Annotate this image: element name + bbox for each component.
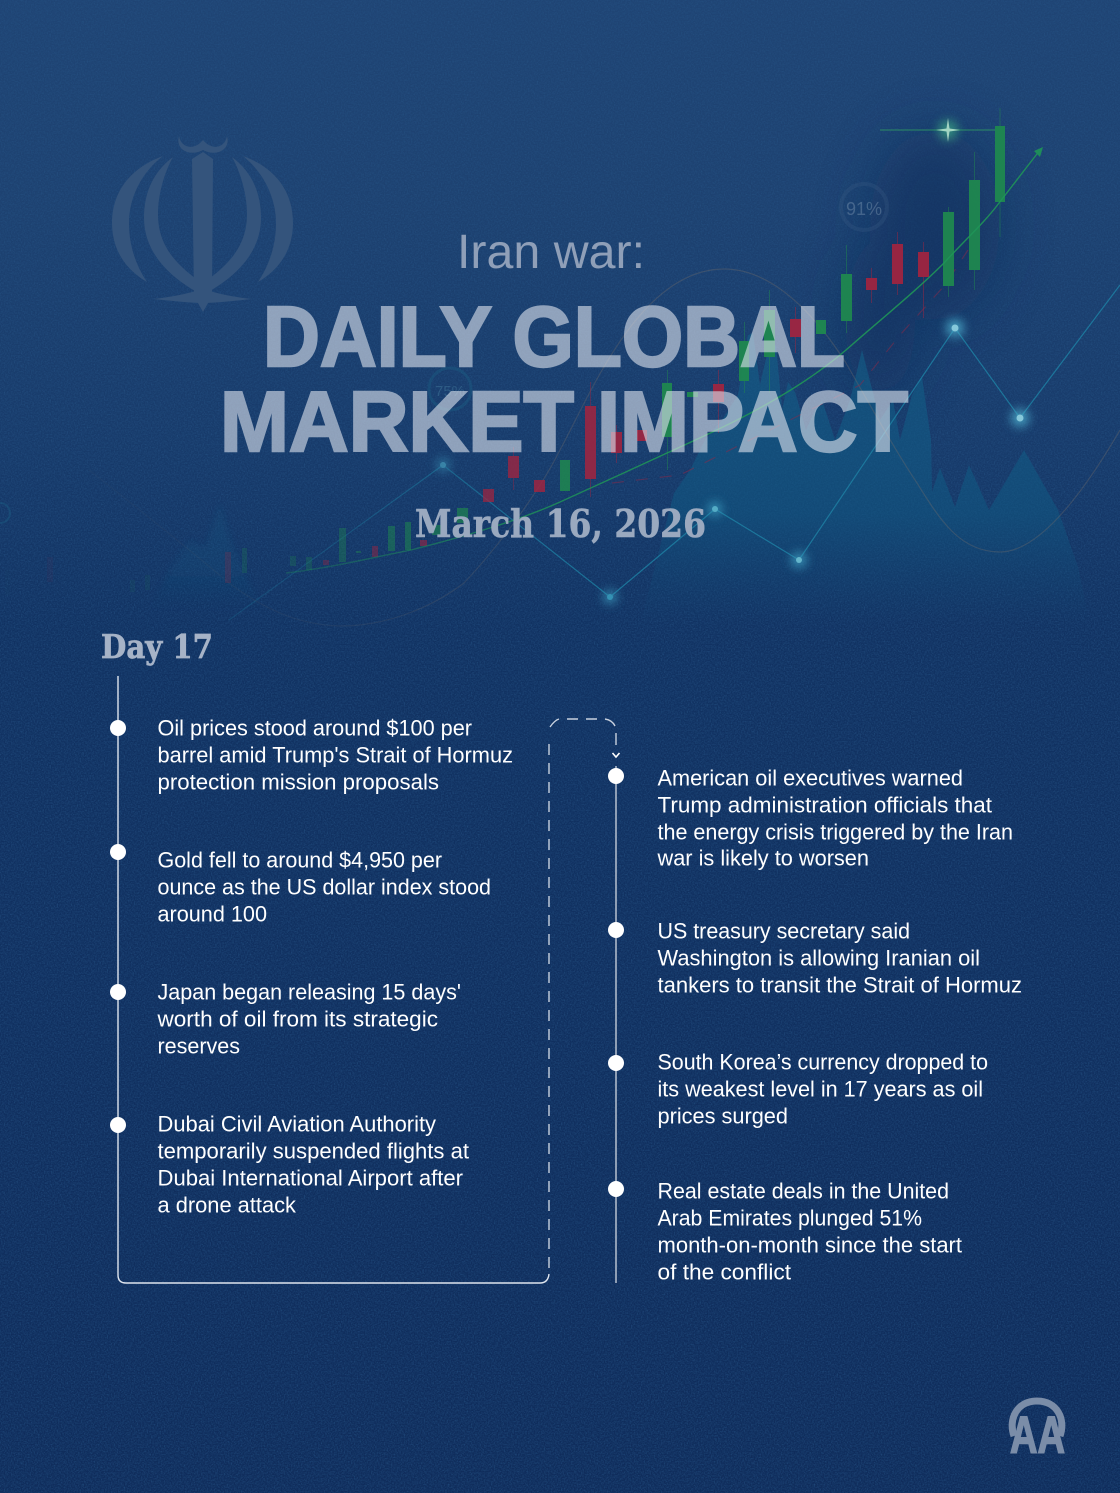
event: oil executives <box>608 766 1013 870</box>
title: date: March 16, 2026 <box>415 501 706 546</box>
title: main heading: DAILY GLOBAL <box>263 290 845 385</box>
gauge: partial ring at left edge <box>0 503 10 523</box>
chart: green rising trend arrow <box>286 147 1043 573</box>
event: US treasury <box>608 918 1022 998</box>
chart: teal area mountain <box>640 333 1090 625</box>
event: Japan reserves: worth of oil from its strategic <box>156 1006 438 1032</box>
timeline connector: dashed link to right column <box>549 719 616 1268</box>
gauge: 91% ring: 91% <box>846 199 882 219</box>
event: Dubai flights: Dubai International Airport after <box>158 1166 463 1190</box>
panel: right column events <box>608 766 1022 1284</box>
event: South Korea: prices surged <box>658 1104 788 1128</box>
icon: dark rocket silhouette behind candles <box>845 130 1000 400</box>
event: oil executives: the energy crisis triggered by the Iran <box>658 820 1013 844</box>
event: Dubai flights: temporarily suspended flights at <box>158 1138 469 1164</box>
event: Dubai flights: Dubai Civil Aviation Authority <box>158 1112 436 1136</box>
event: oil prices: Oil prices stood around $100 per <box>158 716 472 740</box>
event: oil prices <box>110 716 513 794</box>
event: UAE real estate: Arab Emirates plunged 51% <box>658 1206 922 1230</box>
timeline line: right column <box>615 766 617 1283</box>
event: Japan reserves <box>110 980 461 1058</box>
event: gold: Gold fell to around $4,950 per <box>158 848 442 872</box>
chart: red dashed trend <box>612 250 968 483</box>
event: oil prices: barrel amid Trump's Strait of Hormuz <box>158 742 513 768</box>
chart: brown sine curve <box>89 269 1120 626</box>
heading: Day 17: Day 17 <box>101 627 213 666</box>
event: UAE real estate: Real estate deals in the United <box>658 1178 949 1204</box>
event: South Korea <box>608 1050 988 1128</box>
icon: chevron arrow <box>612 753 620 757</box>
title: subtitle: Iran war: <box>457 226 645 279</box>
green candles <box>242 108 1005 573</box>
event: oil prices: protection mission proposals <box>158 770 439 794</box>
event: Dubai flights <box>110 1112 469 1218</box>
event: Dubai flights: a drone attack <box>158 1192 297 1218</box>
title block <box>220 226 908 546</box>
event: oil executives: American oil executives warned <box>658 766 963 790</box>
timeline connector: left line and bottom <box>118 676 549 1283</box>
gauge: 75% ring <box>429 368 471 410</box>
event: Japan reserves: reserves <box>158 1034 240 1058</box>
gauge: 91% ring <box>841 184 887 230</box>
event: UAE real estate: of the conflict <box>658 1260 791 1284</box>
event: gold: ounce as the US dollar index stood <box>158 874 491 900</box>
chart: faint teal peaks on the left <box>150 505 262 610</box>
red candles <box>225 232 929 583</box>
event: Japan reserves: Japan began releasing 15 days' <box>158 980 461 1004</box>
event: UAE real estate: month-on-month since the start <box>658 1232 962 1258</box>
event: gold: around 100 <box>158 902 267 926</box>
icon: Iran emblem watermark <box>112 136 293 312</box>
title: main heading: MARKET IMPACT <box>220 375 908 470</box>
logo: Anadolu Agency AA: AA <box>1010 1406 1065 1464</box>
event: South Korea: South Korea’s currency dropped to <box>658 1050 988 1074</box>
logo: Anadolu Agency AA <box>1010 1401 1065 1464</box>
event: South Korea: its weakest level in 17 years as oil <box>658 1076 983 1102</box>
event: US treasury: US treasury secretary said <box>658 918 910 944</box>
event: UAE real estate <box>608 1178 962 1284</box>
icon: glowing star flare <box>880 118 995 142</box>
event: US treasury: Washington is allowing Iranian oil <box>658 946 980 970</box>
event: US treasury: tankers to transit the Strait of Hormuz <box>658 972 1022 998</box>
chart: teal zigzag line with glowing nodes <box>229 285 1120 620</box>
title: main heading <box>220 290 908 470</box>
gauge: 75% ring: 75% <box>435 383 465 400</box>
event: oil executives: Trump administration officials that <box>658 792 992 818</box>
chart: candlesticks <box>225 108 1005 583</box>
event: gold <box>110 844 491 926</box>
panel: left column events <box>110 716 513 1218</box>
event: oil executives: war is likely to worsen <box>657 846 869 870</box>
